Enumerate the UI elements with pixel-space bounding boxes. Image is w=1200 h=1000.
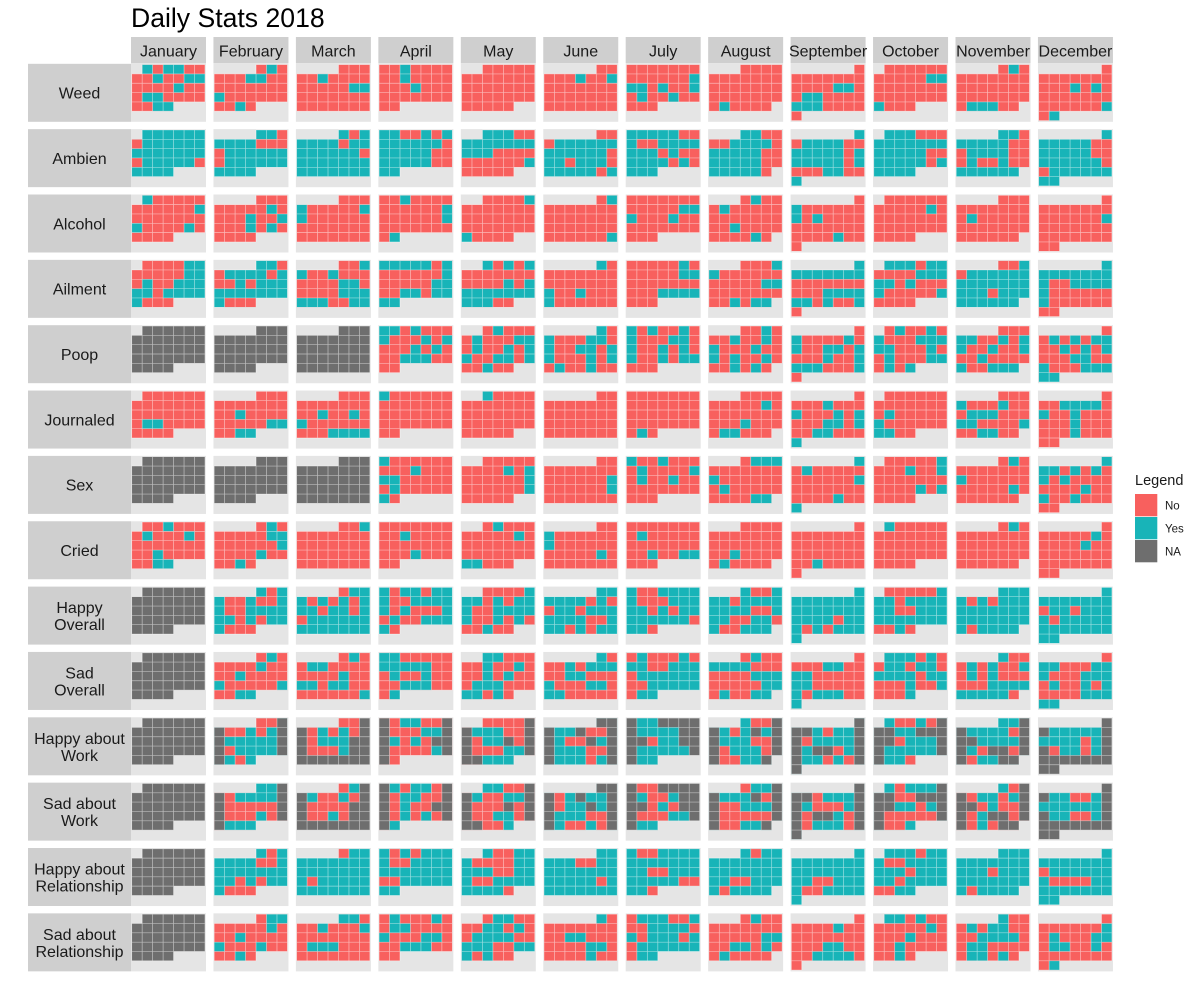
panel: Cried November [955, 521, 1030, 579]
panel: Happy about Work May [461, 717, 536, 775]
panel: Ambien April [378, 129, 453, 187]
panel: Sad about Work February [213, 783, 288, 841]
panel: Sad about Relationship March [296, 913, 371, 971]
panel: Ambien September [791, 129, 866, 187]
panel: Weed March [296, 64, 371, 122]
panel: Sex March [296, 456, 371, 514]
panel: Happy about Work September [791, 717, 866, 775]
panel: Ambien August [708, 129, 783, 187]
panel: Poop October [873, 325, 948, 383]
panel: Ailment February [213, 260, 288, 318]
panel: Happy Overall May [461, 587, 536, 645]
panel: Happy about Relationship November [955, 848, 1030, 906]
row label: Alcohol [28, 194, 131, 252]
panel: Happy about Work November [955, 717, 1030, 775]
row label: Happy Overall [28, 587, 131, 645]
panel: Sex February [213, 456, 288, 514]
row: Sad about Work [28, 783, 1113, 841]
row label: Journaled: Journaled [44, 412, 115, 429]
panel: Sad about Relationship February [213, 913, 288, 971]
panel: Journaled August [708, 391, 783, 449]
panel: Journaled June [543, 391, 618, 449]
panel: Alcohol June [543, 194, 618, 253]
panel: Ailment March [296, 260, 371, 318]
row label: Ambien: Ambien [52, 151, 107, 168]
row label: Sex: Sex [66, 478, 93, 495]
legend swatch: Yes: Yes [1165, 524, 1184, 536]
panel: Happy Overall August [708, 587, 783, 645]
panel: Happy Overall February [213, 587, 288, 645]
legend title: Legend [1135, 473, 1183, 489]
header: March: March [311, 44, 356, 60]
panel: Journaled October [873, 391, 948, 449]
row: Ambien [28, 129, 1113, 187]
panel: Sad Overall June [543, 652, 618, 710]
panel: Sad Overall November [955, 652, 1030, 710]
panel: Ailment December [1038, 260, 1113, 318]
panel: Alcohol August [708, 194, 783, 253]
row label: Ailment [28, 260, 131, 318]
panel: Happy about Work April [378, 717, 453, 775]
panel: Poop March [296, 325, 371, 383]
panel: Alcohol March [296, 194, 371, 253]
panel: Sad about Work October [873, 783, 948, 841]
panel: Weed August [708, 64, 783, 122]
panel: Cried August [708, 521, 783, 579]
panel: Journaled January [131, 391, 206, 449]
row label: Sad about Relationship: Relationship [35, 944, 124, 961]
panel: Cried October [873, 521, 948, 579]
panel: Happy about Work February [213, 717, 288, 775]
panel: Sad about Relationship November [955, 913, 1030, 971]
panel: Alcohol April [378, 194, 453, 253]
panel: Ambien May [461, 129, 536, 187]
header: January [131, 37, 206, 63]
row label: Cried: Cried [60, 543, 99, 560]
header: February: February [219, 44, 283, 60]
row label: Sad Overall [28, 652, 131, 710]
panel: Ambien October [873, 129, 948, 187]
panel: Ambien July [626, 129, 701, 187]
panel: Poop September [791, 325, 866, 383]
panel: Sad about Work June [543, 783, 618, 841]
panel: Weed September [791, 64, 866, 122]
row label: Happy about Work [28, 717, 131, 775]
row: Happy about Relationship [28, 848, 1113, 906]
header: July: July [649, 44, 677, 60]
panel: Ailment October [873, 260, 948, 318]
panel: Alcohol May [461, 194, 536, 253]
panel: Journaled November [955, 391, 1030, 449]
panel: Cried May [461, 521, 536, 579]
panel: Alcohol January [131, 194, 206, 253]
header: September [789, 37, 868, 63]
panel: Sad Overall December [1038, 652, 1113, 710]
panel: Happy Overall December [1038, 587, 1113, 645]
panel: Alcohol November [955, 194, 1030, 253]
panel: Sad about Relationship August [708, 913, 783, 971]
panel: Cried April [378, 521, 453, 579]
row label: Weed: Weed [59, 86, 100, 103]
panel: Sad about Relationship April [378, 913, 453, 971]
panel: Sad about Relationship September [791, 913, 866, 971]
row label: Happy about Relationship [28, 848, 131, 906]
panel: Journaled April [378, 391, 453, 449]
panel: Cried July [626, 521, 701, 579]
row label: Cried [28, 521, 131, 579]
header: June [543, 37, 618, 63]
panel: Sad about Relationship October [873, 913, 948, 971]
title: Daily Stats 2018 [131, 3, 325, 33]
panel: Happy about Work January [131, 717, 206, 775]
panel: Poop December [1038, 325, 1113, 383]
row: Weed [28, 64, 1113, 122]
row label: Poop [28, 325, 131, 383]
panel: Weed July [626, 64, 701, 122]
panel: Happy Overall July [626, 587, 701, 645]
panel: Sad Overall August [708, 652, 783, 710]
panel: Happy about Relationship June [543, 848, 618, 906]
header: April [378, 37, 453, 63]
panel: Journaled March [296, 391, 371, 449]
panel: Weed October [873, 64, 948, 122]
panel: Happy about Relationship October [873, 848, 948, 906]
panel: Weed February [213, 64, 288, 122]
panel: Sad about Relationship May [461, 913, 536, 971]
row label: Sad about Work: Sad about [43, 796, 117, 813]
legend swatch: No: No [1165, 500, 1180, 512]
panel: Ailment September [791, 260, 866, 318]
row label: Happy Overall: Overall [54, 617, 105, 634]
panel: Happy about Relationship July [626, 848, 701, 906]
header: November: November [956, 44, 1031, 60]
header: April: April [400, 44, 432, 60]
panel: Ambien December [1038, 129, 1113, 187]
legend swatch: NA: NA [1165, 546, 1181, 558]
panel: Journaled December [1038, 391, 1113, 449]
panel: Happy Overall October [873, 587, 948, 645]
panel: Happy about Relationship August [708, 848, 783, 906]
panel: Weed April [378, 64, 453, 122]
panel: Sad about Relationship July [626, 913, 701, 971]
panel: Weed May [461, 64, 536, 122]
panel: Poop June [543, 325, 618, 383]
panel: Alcohol July [626, 194, 701, 253]
row label: Happy about Relationship: Relationship [35, 878, 124, 895]
panel: Sad about Work January [131, 783, 206, 841]
row label: Ambien [28, 129, 131, 187]
header: December [1038, 37, 1113, 63]
panel: Weed December [1038, 64, 1113, 122]
panel: Ailment June [543, 260, 618, 318]
row: Happy Overall [28, 587, 1113, 645]
header: March [296, 37, 371, 63]
panel: Ailment August [708, 260, 783, 318]
panel: Happy about Relationship March [296, 848, 371, 906]
panel: Happy about Work June [543, 717, 618, 775]
panel: Sex August [708, 456, 783, 514]
panel: Weed January [131, 64, 206, 122]
row: Cried [28, 521, 1113, 579]
panel: Poop August [708, 325, 783, 383]
panel: Happy about Work December [1038, 717, 1113, 775]
panel: Cried February [213, 521, 288, 579]
panel: Happy about Relationship September [791, 848, 866, 906]
row label: Sad about Work: Work [61, 813, 99, 830]
panel: Sad about Work July [626, 783, 701, 841]
row: Sex [28, 456, 1113, 514]
panel: Sad Overall February [213, 652, 288, 710]
row: Ailment [28, 260, 1113, 318]
row label: Sad about Relationship: Sad about [43, 927, 117, 944]
panel: Ambien February [213, 129, 288, 187]
panel: Sad about Work November [955, 783, 1030, 841]
row: Happy about Work [28, 717, 1113, 775]
panel: Ailment November [955, 260, 1030, 318]
panel: Cried December [1038, 521, 1113, 579]
header: January: January [140, 44, 197, 60]
header: May: May [483, 44, 513, 60]
panel: Happy about Work July [626, 717, 701, 775]
panel: Ailment May [461, 260, 536, 318]
panel: Alcohol October [873, 194, 948, 253]
row label: Alcohol: Alcohol [53, 216, 106, 233]
panel: Journaled July [626, 391, 701, 449]
row label: Happy about Relationship: Happy about [34, 861, 125, 878]
row label: Journaled [28, 391, 131, 449]
panel: Sad about Relationship June [543, 913, 618, 971]
panel: Poop July [626, 325, 701, 383]
header: August: August [721, 44, 771, 60]
panel: Sad about Work December [1038, 783, 1113, 841]
panel: Ambien January [131, 129, 206, 187]
header: November [956, 37, 1031, 63]
month header strips [131, 37, 1113, 63]
panel: Ailment July [626, 260, 701, 318]
panel: Sad about Work March [296, 783, 371, 841]
row: Journaled [28, 391, 1113, 449]
panel: Weed November [955, 64, 1030, 122]
panel: Happy Overall January [131, 587, 206, 645]
panel: Poop April [378, 325, 453, 383]
header: October: October [882, 44, 940, 60]
panel: Sex September [791, 456, 866, 514]
panel: Happy about Relationship December [1038, 848, 1113, 906]
row label: Poop: Poop [61, 347, 98, 364]
panel: Sex May [461, 456, 536, 514]
row label: Sad Overall: Sad [65, 665, 94, 682]
panel: Sad Overall March [296, 652, 371, 710]
panel: Ambien June [543, 129, 618, 187]
panel: Sad Overall July [626, 652, 701, 710]
panel: Happy Overall March [296, 587, 371, 645]
panel: Sad Overall October [873, 652, 948, 710]
panel: Sad about Work May [461, 783, 536, 841]
panel: Weed June [543, 64, 618, 122]
header: May [461, 37, 536, 63]
row label: Sad about Work [28, 783, 131, 841]
panel: Journaled February [213, 391, 288, 449]
panel: Sex June [543, 456, 618, 514]
panel: Ailment January [131, 260, 206, 318]
panel: Ailment April [378, 260, 453, 318]
panel: Sad about Work August [708, 783, 783, 841]
row label: Happy about Work: Happy about [34, 731, 125, 748]
panel: Happy Overall April [378, 587, 453, 645]
row label: Sad about Relationship [28, 913, 131, 971]
panel: Sex July [626, 456, 701, 514]
panel: Sex December [1038, 456, 1113, 514]
panel: Sad Overall September [791, 652, 866, 710]
header: September: September [789, 44, 868, 60]
panel: Sad about Work September [791, 783, 866, 841]
header: February [213, 37, 288, 63]
header: December: December [1039, 44, 1113, 60]
panel: Sad about Relationship January [131, 913, 206, 971]
panel: Sad about Work April [378, 783, 453, 841]
panel: Cried September [791, 521, 866, 579]
panel: Sex October [873, 456, 948, 514]
panel: Happy Overall November [955, 587, 1030, 645]
panel: Cried January [131, 521, 206, 579]
panel: Cried June [543, 521, 618, 579]
header: July [626, 37, 701, 63]
header: August [708, 37, 783, 63]
panel: Poop February [213, 325, 288, 383]
panel: Happy Overall September [791, 587, 866, 645]
panel: Sad Overall January [131, 652, 206, 710]
row label: Ailment: Ailment [53, 282, 107, 299]
row label: Weed [28, 64, 131, 122]
panel: Sad Overall May [461, 652, 536, 710]
header: June: June [563, 44, 598, 60]
panel: Ambien November [955, 129, 1030, 187]
panel: Happy about Relationship April [378, 848, 453, 906]
panel: Sex January [131, 456, 206, 514]
panel: Happy about Work March [296, 717, 371, 775]
row label: Happy about Work: Work [61, 748, 99, 765]
panel: Happy about Relationship February [213, 848, 288, 906]
row: Sad Overall [28, 652, 1113, 710]
panel: Alcohol February [213, 194, 288, 253]
row label: Sad Overall: Overall [54, 682, 105, 699]
panel: Alcohol September [791, 194, 866, 253]
panel: Sex November [955, 456, 1030, 514]
panel: Sex April [378, 456, 453, 514]
row label: Sex [28, 456, 131, 514]
panel: Journaled September [791, 391, 866, 449]
row: Alcohol [28, 194, 1113, 253]
row label: Happy Overall: Happy [56, 600, 103, 617]
row: Poop [28, 325, 1113, 383]
panel: Happy Overall June [543, 587, 618, 645]
legend [1135, 473, 1184, 562]
panel: Poop January [131, 325, 206, 383]
panel: Cried March [296, 521, 371, 579]
panel: Poop November [955, 325, 1030, 383]
row: Sad about Relationship [28, 913, 1113, 971]
panel: Happy about Relationship May [461, 848, 536, 906]
panel: Sad Overall April [378, 652, 453, 710]
panel: Alcohol December [1038, 194, 1113, 253]
panel: Poop May [461, 325, 536, 383]
panel: Ambien March [296, 129, 371, 187]
header: October [873, 37, 948, 63]
panel: Journaled May [461, 391, 536, 449]
panel: Happy about Work August [708, 717, 783, 775]
panel: Happy about Relationship January [131, 848, 206, 906]
panel: Sad about Relationship December [1038, 913, 1113, 971]
panel: Happy about Work October [873, 717, 948, 775]
